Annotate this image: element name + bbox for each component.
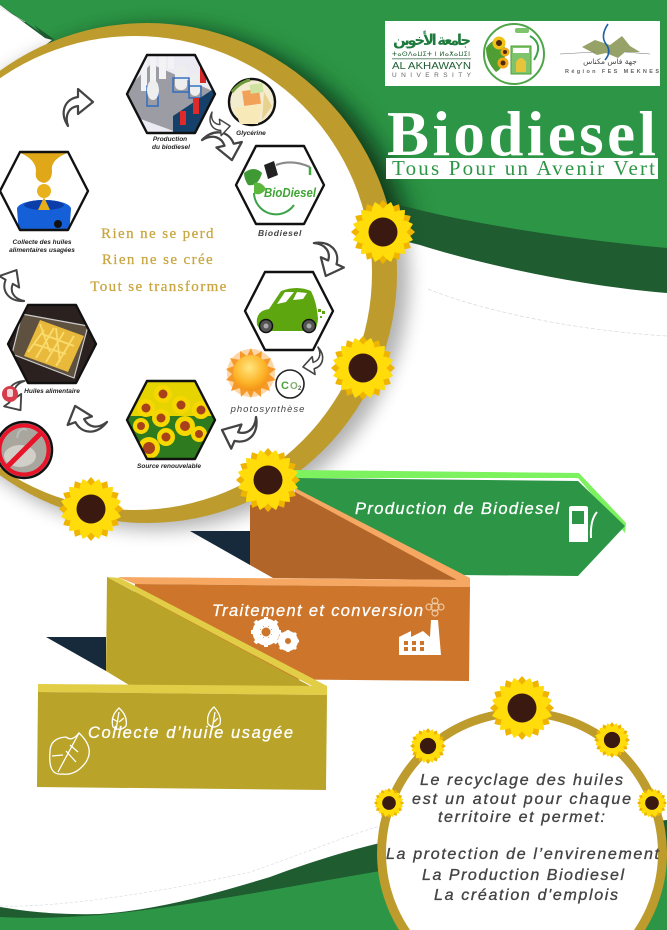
- title: Biodiesel: [387, 99, 656, 169]
- hexagon: fries: [8, 304, 96, 384]
- arrow: car to photosynthesis: [300, 347, 325, 376]
- step: collecte d'huile ribbon: [37, 577, 327, 790]
- main gold ring panel: [0, 23, 397, 523]
- icon: CO2: 2: [298, 386, 302, 392]
- icon: sun: [226, 348, 276, 398]
- centre motto: Rien ne se perd: [101, 226, 215, 242]
- icon: factory: [399, 598, 444, 655]
- icon: CO2: O: [290, 381, 298, 392]
- hexagon: biodiesel logo: [236, 145, 324, 225]
- centre motto: [90, 226, 228, 295]
- arrow: production to biodiesel: [201, 127, 245, 165]
- text: recycling message: La Production Biodiesel: [422, 867, 624, 884]
- arrow: fries to sink: [0, 378, 37, 417]
- label: production: Production: [153, 136, 187, 143]
- step: production de biodiesel ribbon: Production de Biodiesel: [355, 500, 560, 518]
- hexagon: sunflower field: [127, 380, 215, 460]
- logo: al akhawayn: AL AKHAWAYN: [392, 61, 471, 72]
- text: recycling message: territoire et permet:: [438, 809, 605, 826]
- faint dashed curve right: [428, 289, 667, 336]
- label: production: [152, 136, 190, 151]
- logo: al akhawayn: [392, 31, 472, 79]
- arrow: to production: [64, 89, 93, 126]
- centre motto: Rien ne se crée: [102, 252, 214, 268]
- step: traitement et conversion ribbon: [118, 577, 470, 681]
- sunflowers on main ring: [59, 200, 415, 541]
- icon: forbidden sink: [0, 422, 52, 478]
- arrow: photosynthesis to source: [217, 407, 260, 455]
- label: collecte: [9, 239, 75, 254]
- panel: territory circle: [377, 708, 667, 930]
- step: collecte d'huile ribbon: Collecte d’huile usagée: [88, 724, 293, 742]
- arrow: to collecte: [0, 264, 36, 304]
- hexagon: biodiesel logo: BioDiesel: [264, 185, 316, 200]
- subtitle banner: Tous Pour un Avenir Vert: [392, 156, 655, 180]
- label: photosynthese: photosynthèse: [230, 404, 305, 415]
- ring shadow on green: [104, 18, 424, 211]
- step: production de biodiesel ribbon: [190, 470, 626, 582]
- ring shadow: [0, 26, 409, 530]
- step: traitement et conversion ribbon: Traitement et conversion: [212, 602, 423, 620]
- text: recycling message: La création d'emplois: [434, 887, 618, 904]
- label: biodiesel: Biodiesel: [258, 228, 302, 238]
- arrow: biodiesel to car: [304, 239, 350, 281]
- label: production: du biodiesel: [152, 144, 190, 151]
- logo: biodiesel badge: [484, 24, 544, 84]
- arrow: to glycerine: [209, 110, 231, 137]
- hexagon: production du biodiesel: [127, 54, 215, 134]
- label: glycerine: Glycérine: [236, 130, 266, 137]
- text: recycling message: [386, 772, 660, 904]
- sunflowers on small ring: [374, 676, 667, 818]
- label: huiles alimentaire: Huiles alimentaire: [24, 388, 80, 395]
- logo: region fes meknes: [560, 24, 659, 75]
- arrow: source to fries: [63, 398, 108, 439]
- icon: CO2: [276, 370, 304, 398]
- logo: al akhawayn: UNIVERSITY: [392, 72, 472, 79]
- hexagon: green car: [245, 271, 333, 351]
- label: collecte: alimentaires usagées: [9, 247, 75, 254]
- label: source renouvelable: Source renouvelable: [137, 463, 201, 470]
- icon: leaves: [50, 707, 220, 774]
- centre motto: Tout se transforme: [90, 279, 228, 295]
- logo: al akhawayn: جامعة الأخوين: [393, 31, 471, 49]
- logo: al akhawayn: ⵜⴰⵙⴷⴰⵡⵉⵜ ⵏ ⵍⴰⵅⴰⵡⵉⵏ: [392, 50, 470, 58]
- text: recycling message: Le recyclage des huiles: [420, 772, 623, 789]
- bottom green wave: [0, 820, 667, 930]
- hexagon: collecte des huiles: [0, 151, 88, 235]
- icon: gears: [251, 617, 299, 652]
- logo: region fes meknes: Région FES MEKNES: [565, 69, 659, 75]
- icon: red hand badge: [2, 386, 18, 402]
- text: recycling message: La protection de l’envirenement: [386, 846, 660, 863]
- logo: region fes meknes: جهة فاس مكناس: [583, 57, 637, 66]
- logo banner: [385, 21, 660, 86]
- icon: CO2: C: [281, 380, 289, 392]
- top green swoosh: [0, 0, 667, 293]
- icon: fuel pump: [569, 506, 597, 542]
- icon: glycerine soap: [229, 79, 275, 125]
- label: collecte: Collecte des huiles: [13, 239, 72, 246]
- text: recycling message: est un atout pour chaque: [412, 791, 631, 808]
